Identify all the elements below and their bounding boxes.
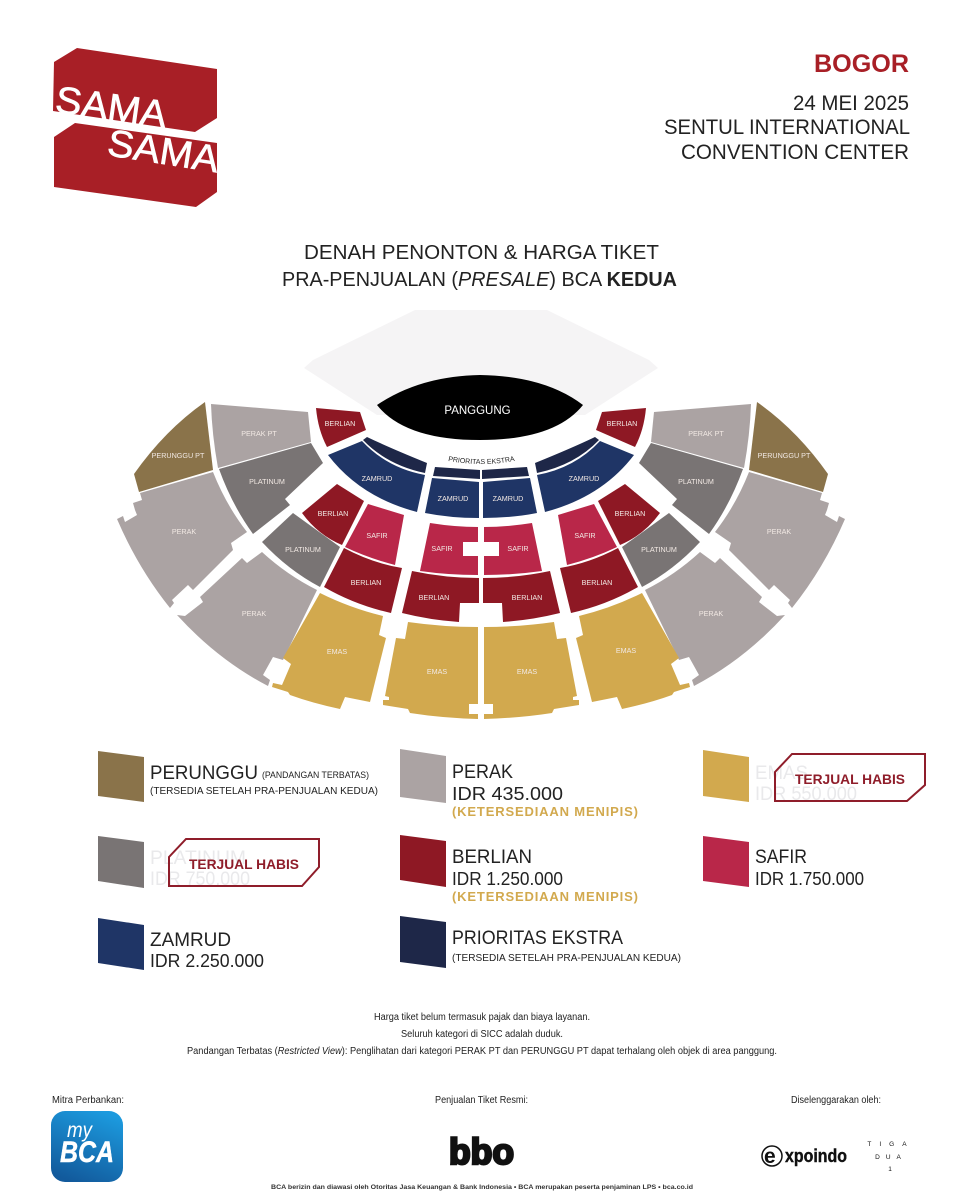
section labels: PLATINUM	[285, 545, 321, 554]
section labels: PANGGUNG	[444, 405, 511, 417]
section labels: PERUNGGU PT	[758, 451, 811, 460]
footer: BCA disclaimer: BCA berizin dan diawasi oleh Otoritas Jasa Keuangan & Bank Indonesia • BCA merupakan peserta penjaminan LPS • bca.co.id	[271, 1184, 693, 1191]
event details: SENTUL INTERNATIONAL	[664, 116, 910, 139]
section labels: PRIORITAS EKSTRA	[448, 456, 515, 464]
legend: platinum sold out: IDR 750.000	[150, 869, 250, 890]
footer: ticket seller: Penjualan Tiket Resmi:	[435, 1095, 528, 1106]
section labels: PLATINUM	[641, 545, 677, 554]
legend: zamrud	[98, 918, 264, 971]
title: PRA-PENJUALAN (PRESALE) BCA KEDUA	[282, 269, 677, 291]
section labels: SAFIR	[366, 531, 388, 540]
event details: CONVENTION CENTER	[681, 141, 909, 164]
seating map	[117, 310, 845, 719]
footer: ticket seller	[435, 1095, 528, 1172]
section labels: ZAMRUD	[438, 494, 468, 503]
event details	[664, 50, 910, 164]
legend: perak: PERAK	[452, 762, 513, 783]
section labels	[152, 405, 811, 676]
section labels: PLATINUM	[249, 477, 285, 486]
footer: organisers: DUA	[875, 1154, 907, 1161]
legend: perunggu: (TERSEDIA SETELAH PRA-PENJUALAN KEDUA)	[150, 785, 378, 797]
legend: prioritas ekstra	[400, 916, 681, 968]
footer: banking partner: Mitra Perbankan:	[52, 1095, 124, 1106]
legend: berlian: BERLIAN	[452, 847, 532, 868]
section labels: SAFIR	[507, 544, 529, 553]
legend: emas sold out: TERJUAL HABIS	[795, 771, 905, 787]
stage backdrop	[304, 310, 658, 415]
section labels: ZAMRUD	[569, 474, 599, 483]
section labels: BERLIAN	[351, 578, 381, 587]
section labels: PERAK	[172, 527, 196, 536]
notes: Pandangan Terbatas (Restricted View): Penglihatan dari kategori PERAK PT dan PERUNGGU PT dapat terhalang oleh objek di area panggung.	[187, 1046, 777, 1057]
legend: berlian: IDR 1.250.000	[452, 869, 563, 889]
event details: 24 MEI 2025	[793, 92, 909, 115]
section labels: BERLIAN	[607, 419, 637, 428]
section labels: PERUNGGU PT	[152, 451, 205, 460]
section labels: SAFIR	[431, 544, 453, 553]
legend: zamrud: IDR 2.250.000	[150, 951, 264, 971]
section labels: PERAK	[242, 609, 266, 618]
section labels: PERAK PT	[241, 429, 277, 438]
logo: Sama Sama: SAMA	[53, 79, 170, 137]
footer: organisers: 1	[888, 1166, 892, 1173]
section labels: EMAS	[616, 646, 636, 655]
title	[282, 242, 677, 291]
legend: perunggu: PERUNGGU	[150, 763, 258, 784]
event details: BOGOR	[814, 50, 909, 78]
section labels: BERLIAN	[615, 509, 645, 518]
section labels: ZAMRUD	[493, 494, 523, 503]
legend: emas sold out	[703, 750, 925, 805]
footer: organisers	[762, 1095, 915, 1173]
section labels: EMAS	[327, 647, 347, 656]
title: DENAH PENONTON & HARGA TIKET	[304, 242, 659, 264]
section labels: BERLIAN	[512, 593, 542, 602]
footer: organisers: xpoindo	[785, 1146, 847, 1166]
legend: berlian: (KETERSEDIAAN MENIPIS)	[452, 889, 638, 904]
section labels: SAFIR	[574, 531, 596, 540]
legend: platinum sold out: PLATINUM	[150, 848, 246, 869]
legend: berlian	[400, 835, 638, 904]
legend: safir	[703, 836, 864, 889]
legend: perunggu	[98, 751, 378, 802]
legend: perak: (KETERSEDIAAN MENIPIS)	[452, 804, 638, 819]
notes: Seluruh kategori di SICC adalah duduk.	[401, 1029, 563, 1040]
footer: organisers: e	[764, 1145, 776, 1168]
footer: banking partner: BCA	[60, 1136, 114, 1169]
legend: perunggu: (PANDANGAN TERBATAS)	[262, 770, 369, 780]
section labels: EMAS	[517, 667, 537, 676]
footer: ticket seller: bbo	[449, 1131, 514, 1172]
section labels: PERAK	[767, 527, 791, 536]
notes	[187, 1012, 777, 1057]
section labels: PERAK	[699, 609, 723, 618]
legend: safir: IDR 1.750.000	[755, 869, 864, 889]
legend: prioritas ekstra: PRIORITAS EKSTRA	[452, 928, 623, 949]
section labels: BERLIAN	[325, 419, 355, 428]
legend: zamrud: ZAMRUD	[150, 930, 231, 951]
seating: left half	[117, 402, 480, 719]
stage	[377, 375, 583, 440]
legend: perak	[400, 749, 638, 819]
legend: platinum sold out: TERJUAL HABIS	[189, 856, 299, 872]
section labels: PERAK PT	[688, 429, 724, 438]
legend: safir: SAFIR	[755, 847, 807, 868]
seating: right half (mirror)	[482, 402, 845, 719]
section labels: BERLIAN	[419, 593, 449, 602]
legend: prioritas ekstra: (TERSEDIA SETELAH PRA-PENJUALAN KEDUA)	[452, 952, 681, 964]
footer: banking partner	[51, 1095, 124, 1182]
footer: organisers: Diselenggarakan oleh:	[791, 1095, 881, 1106]
footer: organisers: TIGA	[867, 1141, 915, 1148]
logo: Sama Sama: SAMA	[105, 122, 222, 182]
legend: perak: IDR 435.000	[452, 784, 563, 804]
legend: platinum sold out	[98, 836, 319, 890]
logo: Sama Sama	[53, 48, 222, 207]
section labels: BERLIAN	[582, 578, 612, 587]
section labels: ZAMRUD	[362, 474, 392, 483]
notes: Harga tiket belum termasuk pajak dan biaya layanan.	[374, 1012, 590, 1023]
section labels: EMAS	[427, 667, 447, 676]
legend: emas sold out: IDR 550.000	[755, 784, 857, 805]
section labels: BERLIAN	[318, 509, 348, 518]
legend: emas sold out: EMAS	[755, 763, 808, 784]
section labels: PLATINUM	[678, 477, 714, 486]
footer: banking partner: my	[67, 1119, 93, 1142]
